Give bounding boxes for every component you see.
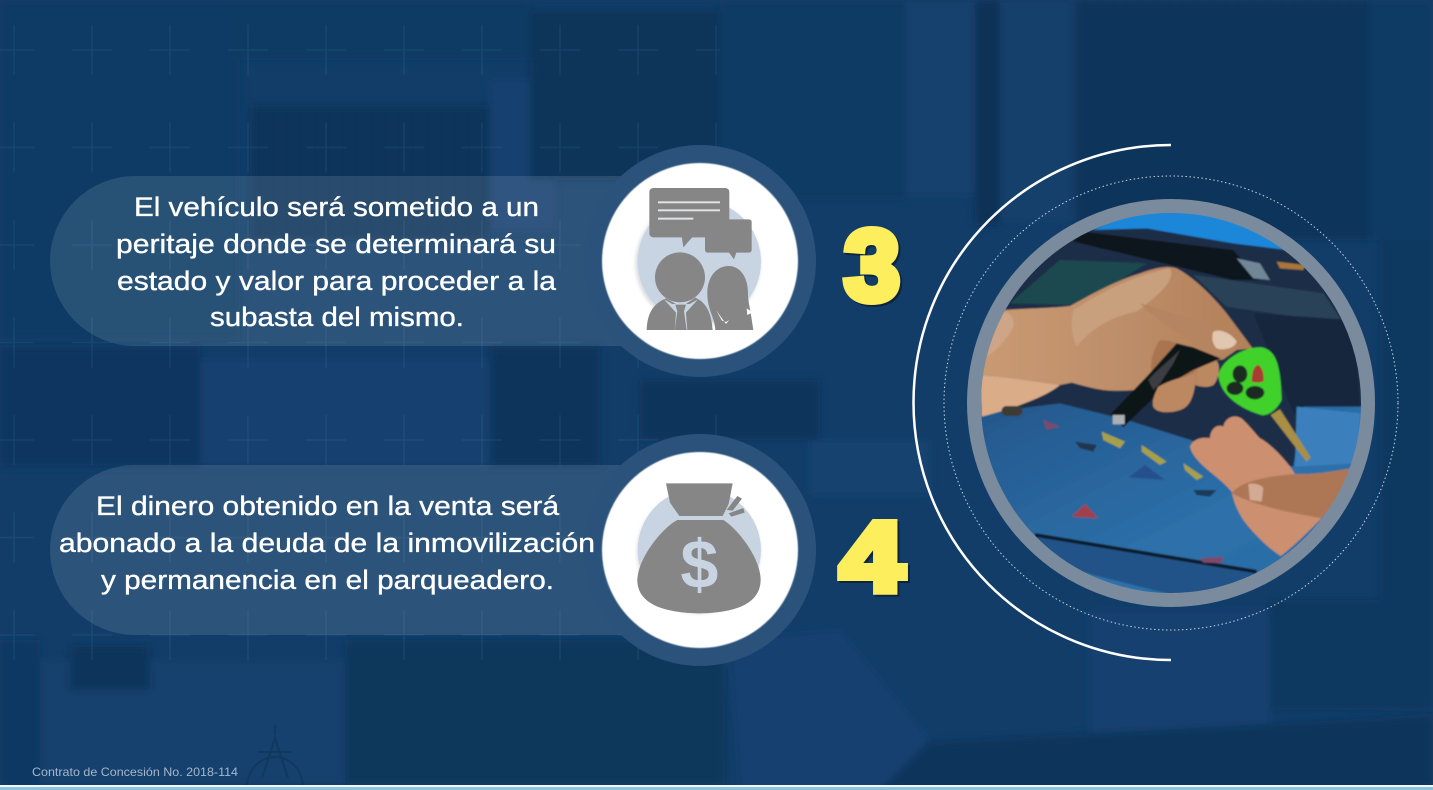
number 3: 3 — [846, 212, 902, 324]
white arc — [914, 145, 1171, 660]
panel: step 3 — [50, 145, 902, 377]
pill: step 3 background — [50, 176, 640, 346]
pill: step 4 background — [50, 465, 640, 635]
photo: hands passing a car key — [973, 207, 1373, 600]
key leather — [1111, 343, 1221, 427]
photo background — [981, 228, 1361, 466]
decorative rings and photo — [914, 145, 1398, 660]
white disc: step 3 — [602, 163, 798, 359]
text: step 4 description: abonado a la deuda de la inmovilización — [59, 528, 595, 558]
panel: step 4 — [50, 434, 906, 666]
text: step 4 description: y permanencia en el parqueadero. — [101, 565, 554, 595]
icon: money bag: $ — [680, 527, 718, 603]
photo frame ring — [974, 206, 1368, 600]
halo ring: step 4 — [584, 434, 816, 666]
halo ring: step 3 — [584, 145, 816, 377]
number 4: 4 — [842, 504, 906, 614]
text: step 3 description: subasta del mismo. — [210, 302, 464, 332]
upper hand — [980, 267, 1253, 412]
icon: money bag — [637, 483, 761, 614]
text: step 3 description — [116, 192, 557, 332]
receiving hand — [1190, 417, 1349, 556]
lower wrist — [980, 375, 1060, 417]
white disc: step 4 — [602, 452, 798, 648]
text: step 3 description: peritaje donde se determinará su — [116, 229, 556, 259]
key blade — [1271, 409, 1311, 462]
footer stripe — [0, 785, 1433, 790]
number 4: 4 — [840, 502, 904, 612]
text: step 4 description: El dinero obtenido en la venta será — [96, 491, 560, 521]
text: step 3 description: El vehículo será sometido a un — [134, 192, 539, 222]
number 3: 3 — [844, 210, 900, 322]
text: step 3 description: estado y valor para proceder a la — [117, 266, 557, 296]
footer contract note: Contrato de Concesión No. 2018-114 — [32, 765, 238, 779]
icon: two people with speech bubbles — [635, 188, 761, 330]
fingers in front of key leather — [1153, 363, 1219, 412]
dotted circle — [944, 176, 1398, 630]
text: step 4 description — [59, 491, 595, 595]
key fob — [1218, 347, 1282, 415]
